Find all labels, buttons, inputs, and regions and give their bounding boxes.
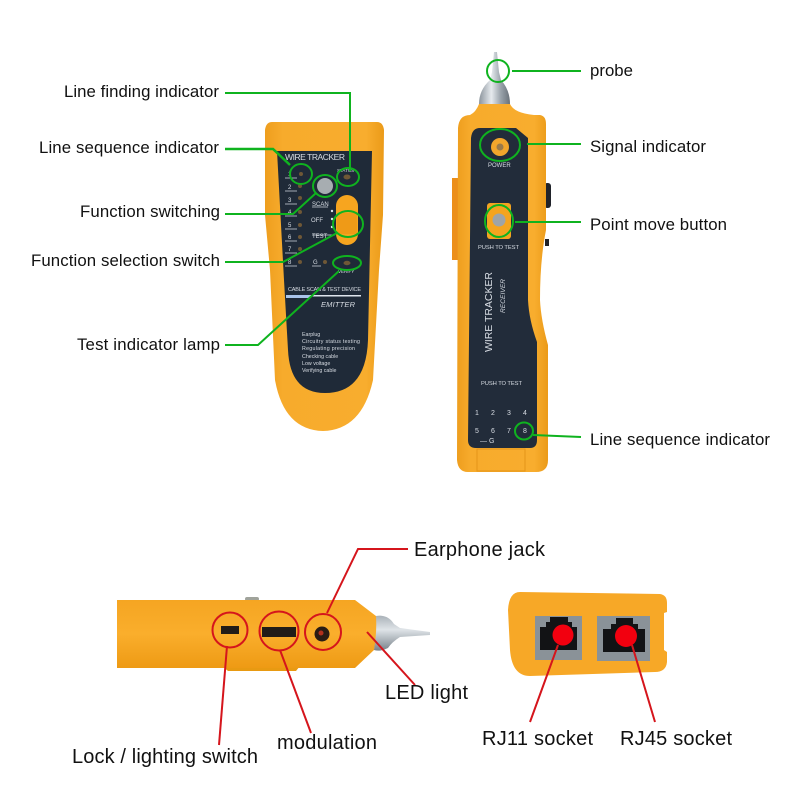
device: socket end view xyxy=(508,592,667,676)
red callouts xyxy=(212,549,655,745)
emitter panel text: Earplug xyxy=(302,332,320,338)
emitter panel text: 7 xyxy=(288,247,292,253)
side view probe xyxy=(374,616,430,651)
receiver panel text: POWER xyxy=(488,163,511,169)
label: point move: Point move button xyxy=(590,215,727,234)
label: function selection: Function selection switch xyxy=(31,251,220,270)
device: emitter xyxy=(265,122,384,431)
receiver panel text: WIRE TRACKER xyxy=(483,272,495,352)
callout line: line sequence xyxy=(225,149,290,165)
receiver bottom step xyxy=(477,449,525,471)
receiver panel text: 1 xyxy=(475,410,479,417)
device: side view xyxy=(117,597,430,671)
callout line: RJ11 xyxy=(530,645,558,722)
ring: function button xyxy=(313,175,337,197)
emitter panel text: Verifying cable xyxy=(302,368,337,374)
label: modulation: modulation xyxy=(277,732,377,754)
emitter panel text: CABLE SCAN & TEST DEVICE xyxy=(288,287,361,293)
label: RJ11: RJ11 socket xyxy=(482,728,593,750)
earphone jack hole xyxy=(314,626,330,642)
emitter panel text: 4 xyxy=(288,210,292,216)
receiver panel text: 8 xyxy=(523,428,527,435)
lock switch slot xyxy=(221,626,239,634)
ring: line sequence xyxy=(290,164,312,184)
emitter panel text: 2 xyxy=(288,185,292,191)
emitter function button xyxy=(317,178,333,194)
receiver panel text: 5 xyxy=(475,428,479,435)
emitter panel text: WIRE TRACKER xyxy=(285,152,345,162)
receiver panel text: PUSH TO TEST xyxy=(478,245,519,251)
receiver panel text: 2 xyxy=(491,410,495,417)
receiver panel text xyxy=(475,163,527,445)
emitter selector dots xyxy=(331,210,333,228)
callout line: LED xyxy=(367,632,415,685)
ring: status xyxy=(337,168,359,186)
emitter switch xyxy=(336,195,358,245)
label: signal: Signal indicator xyxy=(590,137,706,156)
emitter status lamps xyxy=(298,172,350,265)
receiver panel text: 7 xyxy=(507,428,511,435)
RJ45 red marker xyxy=(615,625,637,647)
emitter body xyxy=(265,122,384,431)
RJ11 socket xyxy=(535,616,582,660)
emitter panel text: G xyxy=(313,260,318,266)
emitter panel text xyxy=(285,152,361,374)
callout line: modulation xyxy=(280,650,311,733)
label: line finding: Line finding indicator xyxy=(64,82,219,101)
ring: function switch xyxy=(333,211,363,237)
receiver body xyxy=(457,104,548,472)
modulation wheel slot xyxy=(262,627,296,637)
ring: test lamp xyxy=(333,256,361,270)
emitter panel text: Checking cable xyxy=(302,354,338,360)
emitter panel text: 5 xyxy=(288,223,292,229)
side view bottom bump xyxy=(222,666,300,671)
label: receiver line sequence: Line sequence indicator xyxy=(590,430,770,449)
emitter panel text: 1 xyxy=(288,172,292,178)
emitter panel text: Regulating precision xyxy=(302,346,355,352)
callout line: earphone jack xyxy=(327,549,408,613)
emitter panel text: VERIFY xyxy=(338,269,354,274)
ring: point move xyxy=(485,205,513,237)
callout line: test lamp xyxy=(225,271,339,345)
emitter number underlines xyxy=(285,178,335,266)
emitter dark panel xyxy=(277,151,372,393)
receiver panel text: 6 xyxy=(491,428,495,435)
receiver side wheel xyxy=(544,183,551,246)
receiver probe xyxy=(479,52,510,104)
callout line: probe xyxy=(512,70,581,72)
receiver push button xyxy=(487,203,511,239)
label: RJ45: RJ45 socket xyxy=(620,728,732,750)
emitter panel text: EMITTER xyxy=(321,300,356,309)
receiver dark panel xyxy=(468,128,537,448)
callout line: point move xyxy=(515,221,581,223)
ring: modulation xyxy=(260,612,298,650)
emitter panel divider xyxy=(286,295,361,298)
receiver power lamp xyxy=(491,138,509,156)
label: function switching: Function switching xyxy=(80,202,220,221)
device: receiver xyxy=(452,52,551,472)
label: LED light: LED light xyxy=(385,682,468,704)
label: test lamp: Test indicator lamp xyxy=(77,335,220,354)
side view body xyxy=(117,600,376,668)
callout line: lock switch xyxy=(219,646,227,745)
label: probe: probe xyxy=(590,61,633,80)
ring: signal xyxy=(480,129,520,161)
emitter panel text: 6 xyxy=(288,235,292,241)
label: line sequence: Line sequence indicator xyxy=(39,138,219,157)
RJ11 red marker xyxy=(552,624,574,646)
emitter panel text: Low voltage xyxy=(302,361,330,367)
receiver side clip xyxy=(452,178,460,260)
emitter panel text: OFF xyxy=(311,218,323,224)
ring: earphone jack xyxy=(305,614,341,650)
emitter panel text: TEST xyxy=(312,234,328,240)
label: lock switch: Lock / lighting switch xyxy=(72,746,258,768)
ring: probe xyxy=(487,60,509,82)
emitter panel text: 3 xyxy=(288,198,292,204)
emitter panel text: STATUS xyxy=(337,168,354,173)
side view top stud xyxy=(245,597,259,601)
receiver panel text: PUSH TO TEST xyxy=(481,381,522,387)
callout line: line finding xyxy=(225,93,350,171)
callout line: RJ45 xyxy=(632,645,655,722)
callout line: signal xyxy=(527,143,581,145)
RJ45 socket xyxy=(597,616,650,661)
ring: lock switch xyxy=(212,612,248,648)
callout line: function switching xyxy=(225,193,316,214)
ring: receiver line sequence xyxy=(515,422,533,440)
emitter panel text: SCAN xyxy=(312,202,329,208)
callout line: receiver line sequence xyxy=(533,435,581,437)
green callouts xyxy=(225,60,581,440)
socket end body xyxy=(508,592,667,676)
receiver panel text: 4 xyxy=(523,410,527,417)
emitter panel text: 8 xyxy=(288,260,292,266)
receiver panel text: RECEIVER xyxy=(500,279,507,313)
receiver panel text: — G xyxy=(480,438,494,445)
receiver panel text: 3 xyxy=(507,410,511,417)
label: earphone jack: Earphone jack xyxy=(414,539,546,561)
emitter panel text: Circuitry status testing xyxy=(302,339,360,345)
callout line: function selection xyxy=(225,233,337,262)
